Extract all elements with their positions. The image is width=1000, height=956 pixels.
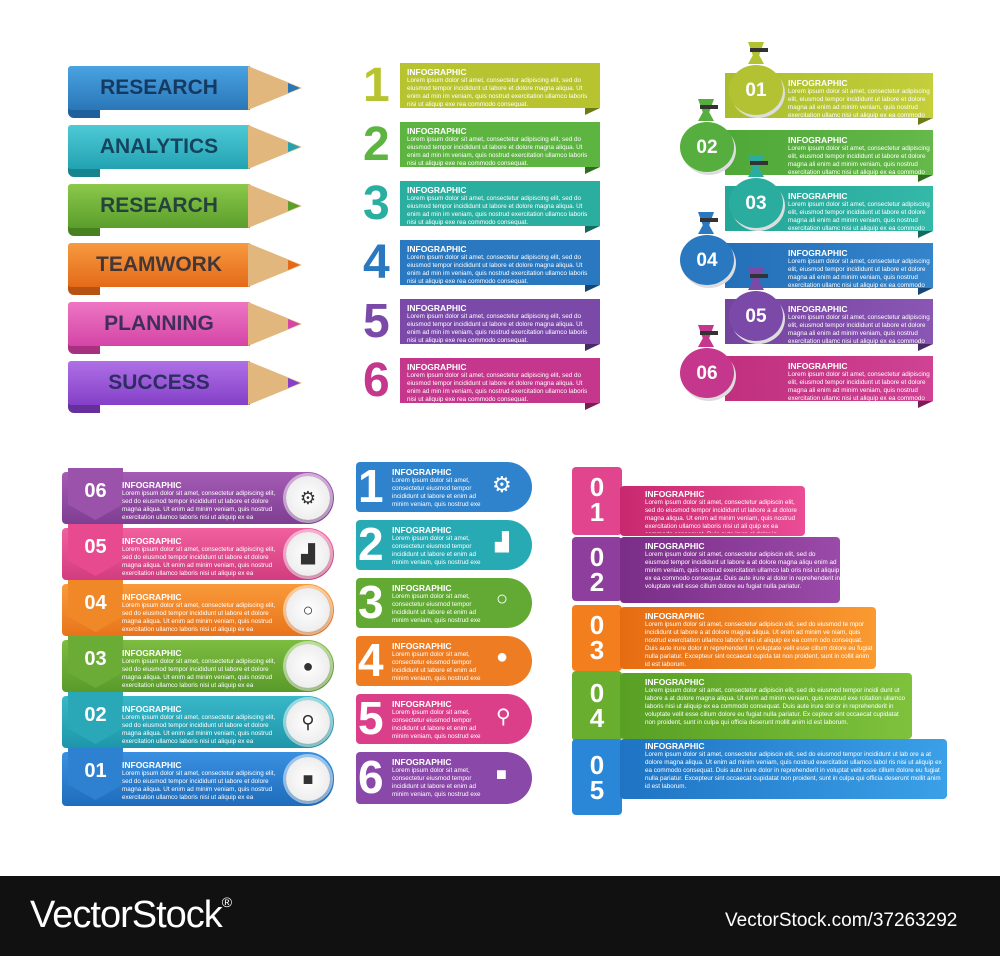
bar 01 briefcase: 01 <box>84 760 107 782</box>
step 05: 5 <box>590 775 604 805</box>
ribbon 1: INFOGRAPHIC <box>407 67 466 77</box>
bar 05 chart: ▟ <box>301 544 315 564</box>
bar 03 head: 03 <box>84 648 107 670</box>
ribbon 4: 4 <box>363 236 390 289</box>
step 01: 1 <box>590 497 604 527</box>
step 04 <box>572 671 912 740</box>
bar 02 search: INFOGRAPHIC <box>122 704 182 714</box>
step 04: Lorem ipsum dolor sit amet, consectetur adipiscin elit, sed do eiusmod tempor incidi dunt ut labore a at dolore magna aliqua. Ut enim ad minim veniam, quis nostrud exe rcitation ullamco laboris nisi ut aliquip ex ea commodo consequat. Duis aute irure dol or in reprehenderit in voluptate velit esse cillum dolore eu fugiat nulla pariatur. Ex cepteur sint occaecat cupidatat non proident, sunt in culpa qui officia deserunt mollit anim id est laborum. <box>645 687 905 726</box>
bag row 01 <box>725 42 933 125</box>
ribbon 4: INFOGRAPHIC <box>407 244 466 254</box>
step 02: Lorem ipsum dolor sit amet, consectetur adipiscin elit, sed do eiusmod tempor incididunt ut labore a at dolore magna aliqu enim ad minim veniam, quis nostrud exercitation ullamco lab oris nisi ut aliquip ex ea commodo consequat. Duis aute irure al dolor in reprehenderit in voluptate velit esse cillum dolore eu fugiat nulla pariatur. <box>645 551 840 590</box>
bar 01 briefcase <box>62 748 334 806</box>
step 02: 2 <box>590 567 604 597</box>
bar 06 gear: ⚙ <box>300 488 316 508</box>
footer bar <box>0 876 1000 956</box>
ribbon 5: 5 <box>363 295 390 348</box>
pill 6 <box>356 751 532 804</box>
bag row 04: 04 <box>696 250 718 271</box>
pencil: research 2 <box>68 184 302 236</box>
bar 06 gear: 06 <box>84 480 107 502</box>
bag row 01: INFOGRAPHIC <box>788 78 848 88</box>
bag row 03 <box>725 155 933 238</box>
pill 5: INFOGRAPHIC <box>392 699 452 709</box>
bar 02 search: 02 <box>84 704 107 726</box>
bar 02 search: ⚲ <box>301 712 315 732</box>
pencil: teamwork: TEAMWORK <box>96 253 222 276</box>
bar 01 briefcase: ■ <box>303 769 313 789</box>
ribbon 4 <box>363 236 600 292</box>
bag row 03: INFOGRAPHIC <box>788 191 848 201</box>
bar 03 head: INFOGRAPHIC <box>122 648 182 658</box>
pencil: planning: PLANNING <box>104 312 214 335</box>
bag row 06 <box>680 325 933 408</box>
pencil: research 2: RESEARCH <box>100 194 218 217</box>
ribbon 2 <box>363 118 600 174</box>
step 05: 0 <box>590 750 604 780</box>
ribbon 3: INFOGRAPHIC <box>407 185 466 195</box>
bag row 04 <box>680 212 933 295</box>
bag row 03: 03 <box>745 193 767 214</box>
bag row 06: INFOGRAPHIC <box>788 361 848 371</box>
bag row 01: 01 <box>745 80 767 101</box>
step 01 <box>572 467 805 536</box>
pencil: research <box>68 66 302 118</box>
pill 3: ○ <box>496 588 508 610</box>
step 01: 0 <box>590 472 604 502</box>
panel: numbered pills <box>356 460 532 804</box>
panel: pencils <box>68 66 302 413</box>
pill 1: INFOGRAPHIC <box>392 467 452 477</box>
pill 4: 4 <box>358 634 384 686</box>
footer: brand: VectorStock® <box>30 894 231 936</box>
step 02: INFOGRAPHIC <box>645 541 704 551</box>
step 05: Lorem ipsum dolor sit amet, consectetur adipiscin elit, sed do eiusmod tempor incididunt ut lab ore a at dolore magna aliqua. Ut enim ad minim veniam, quis nostrud exercitation ullamco labol ris nisi ut aliquip ex ea commodo consequat. Duis aute irure dolor in reprehenderit in voluptat velit esse cillum dolore eu fugiat nulla pariatur. Excepteur sint occaecat cupidatat non proident, sunt in culpa qui officia deserunt mollit anim id est laborum. <box>645 751 942 790</box>
bar 03 head: ● <box>303 656 313 676</box>
pencil: success <box>68 361 302 413</box>
pill 2 <box>356 518 532 570</box>
step 03: Lorem ipsum dolor sit amet, consectetur adipiscin elit, sed do eiusmod te mpor incididunt ut labore a at dolore magna aliqua. Ut enim ad minim ve niam, quis nostrud exercitation ullamco laboris nisi ut aliquip ex ea comm odo consequat. Duis aute irure dolor in reprehenderit in voluptate velit esse cillum dolore eu fugiat nulla pariatur. Excepteur sint occaecat cupida tat non proident, sunt in collit anim id est laborum. <box>645 621 873 668</box>
pill 4 <box>356 634 532 686</box>
pencil: teamwork <box>68 243 302 295</box>
bag row 05 <box>725 268 933 351</box>
pill 2: ▟ <box>495 532 509 552</box>
pill 2: 2 <box>358 518 384 570</box>
ribbon 5 <box>363 295 600 351</box>
bar 03 head <box>62 636 334 692</box>
pill 5: ⚲ <box>496 706 511 728</box>
pill 4: INFOGRAPHIC <box>392 641 452 651</box>
bar 05 chart: INFOGRAPHIC <box>122 536 182 546</box>
step 03: 0 <box>590 610 604 640</box>
bar 05 chart: 05 <box>84 536 107 558</box>
bag row 05: INFOGRAPHIC <box>788 304 848 314</box>
ribbon 1: 1 <box>363 59 390 112</box>
pencil: research: RESEARCH <box>100 76 218 99</box>
bar 04 bulb: INFOGRAPHIC <box>122 592 182 602</box>
pill 1 <box>356 460 532 512</box>
pencil: planning <box>68 302 302 354</box>
step 03 <box>572 605 876 671</box>
pencil: analytics <box>68 125 302 177</box>
step 04: INFOGRAPHIC <box>645 677 704 687</box>
panel: icon bars <box>62 468 334 806</box>
bar 06 gear: INFOGRAPHIC <box>122 480 182 490</box>
bag row 04: INFOGRAPHIC <box>788 248 848 258</box>
bag row 05: 05 <box>745 306 767 327</box>
ribbon 6: INFOGRAPHIC <box>407 362 466 372</box>
panel: staircase <box>572 467 947 815</box>
pill 3 <box>356 576 532 628</box>
bar 05 chart <box>62 524 334 580</box>
step 05: INFOGRAPHIC <box>645 741 704 751</box>
bar 04 bulb: ○ <box>303 600 313 620</box>
bar 04 bulb <box>62 580 334 636</box>
step 05 <box>572 739 947 815</box>
bar 04 bulb: 04 <box>84 592 107 614</box>
bag row 02 <box>680 99 933 182</box>
ribbon 3 <box>363 177 600 233</box>
step 04: 0 <box>590 678 604 708</box>
pill 4: ● <box>496 646 508 668</box>
pill 1: 1 <box>358 460 384 512</box>
pill 3: 3 <box>358 576 384 628</box>
footer: id: VectorStock.com/37263292 <box>725 910 957 931</box>
pill 1: ⚙ <box>492 472 512 497</box>
ribbon 3: 3 <box>363 177 390 230</box>
step 03: 3 <box>590 635 604 665</box>
pill 3: INFOGRAPHIC <box>392 583 452 593</box>
pill 6: INFOGRAPHIC <box>392 757 452 767</box>
ribbon 2: 2 <box>363 118 390 171</box>
pencil: analytics: ANALYTICS <box>100 135 218 158</box>
ribbon 6 <box>363 354 600 410</box>
bag row 02: 02 <box>696 137 718 158</box>
step 04: 4 <box>590 703 604 733</box>
panel: money bags <box>680 42 933 408</box>
bar 02 search <box>62 692 334 748</box>
bar 06 gear <box>62 468 334 524</box>
bag row 02: INFOGRAPHIC <box>788 135 848 145</box>
ribbon 1 <box>363 59 600 115</box>
step 03: INFOGRAPHIC <box>645 611 704 621</box>
bar 01 briefcase: INFOGRAPHIC <box>122 760 182 770</box>
step 02: 0 <box>590 542 604 572</box>
pill 2: INFOGRAPHIC <box>392 525 452 535</box>
step 01: INFOGRAPHIC <box>645 489 704 499</box>
step 02 <box>572 537 840 603</box>
ribbon 5: INFOGRAPHIC <box>407 303 466 313</box>
pill 6: 6 <box>358 751 384 803</box>
pill 6: ■ <box>496 764 507 784</box>
ribbon 6: 6 <box>363 354 390 407</box>
panel: numbered ribbons <box>363 59 600 410</box>
pencil: success: SUCCESS <box>108 371 210 394</box>
ribbon 2: INFOGRAPHIC <box>407 126 466 136</box>
bag row 06: 06 <box>696 363 718 384</box>
pill 5: 5 <box>358 692 384 744</box>
pill 5 <box>356 692 532 744</box>
